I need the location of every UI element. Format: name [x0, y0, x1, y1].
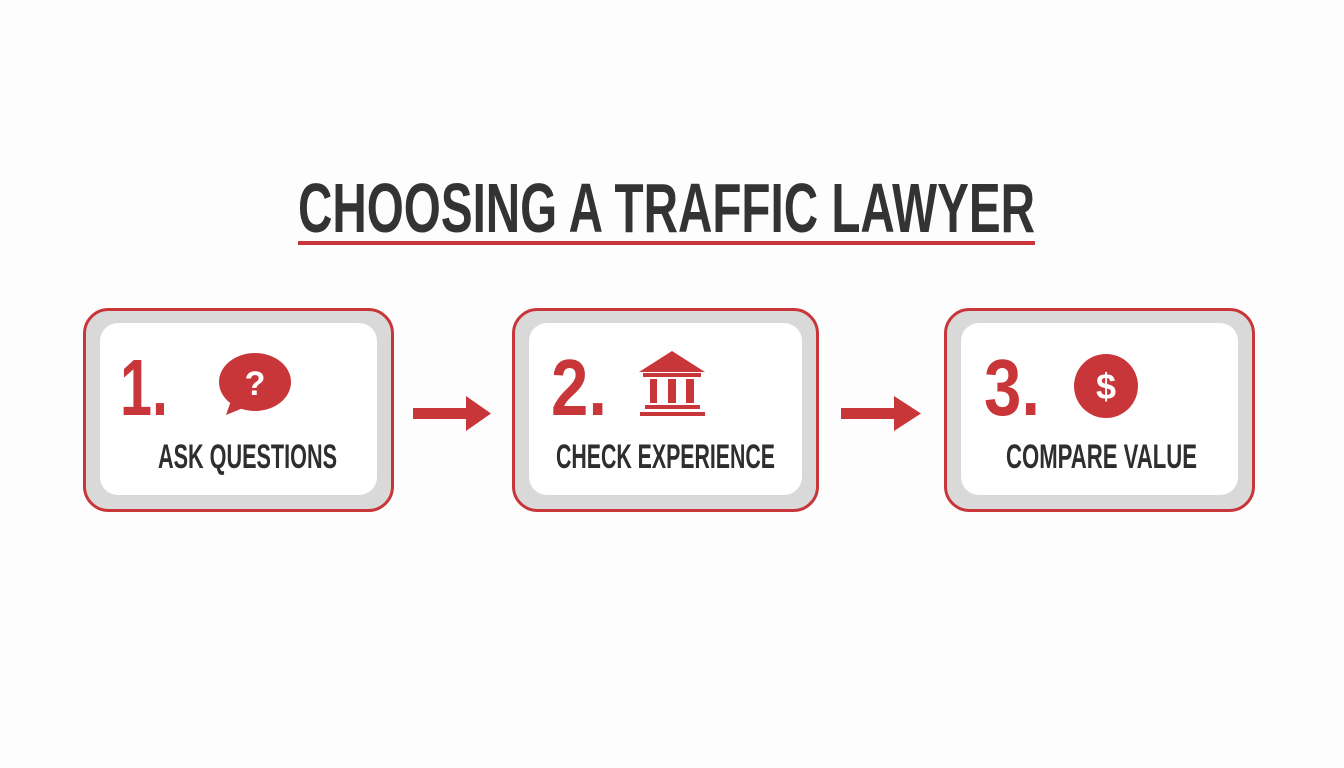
panel: step 3 compare value — [946, 310, 1254, 510]
arrow 2 — [841, 396, 921, 431]
icon: speech bubble question — [219, 353, 291, 415]
label: COMPARE VALUE — [1006, 438, 1197, 476]
panel: step 1 ask questions — [84, 310, 392, 510]
icon: courthouse — [639, 351, 705, 416]
icon: dollar coin — [1074, 354, 1138, 418]
icon: speech bubble question: ? — [245, 365, 265, 403]
icon: dollar coin: $ — [1096, 366, 1116, 407]
arrow 1 — [413, 396, 491, 431]
number 1: 1. — [120, 343, 168, 432]
label: ASK QUESTIONS — [158, 438, 337, 476]
panel: step 2 check experience — [514, 310, 818, 510]
number 3: 3. — [984, 343, 1040, 432]
label: CHECK EXPERIENCE — [556, 438, 775, 476]
number 2: 2. — [551, 343, 607, 432]
